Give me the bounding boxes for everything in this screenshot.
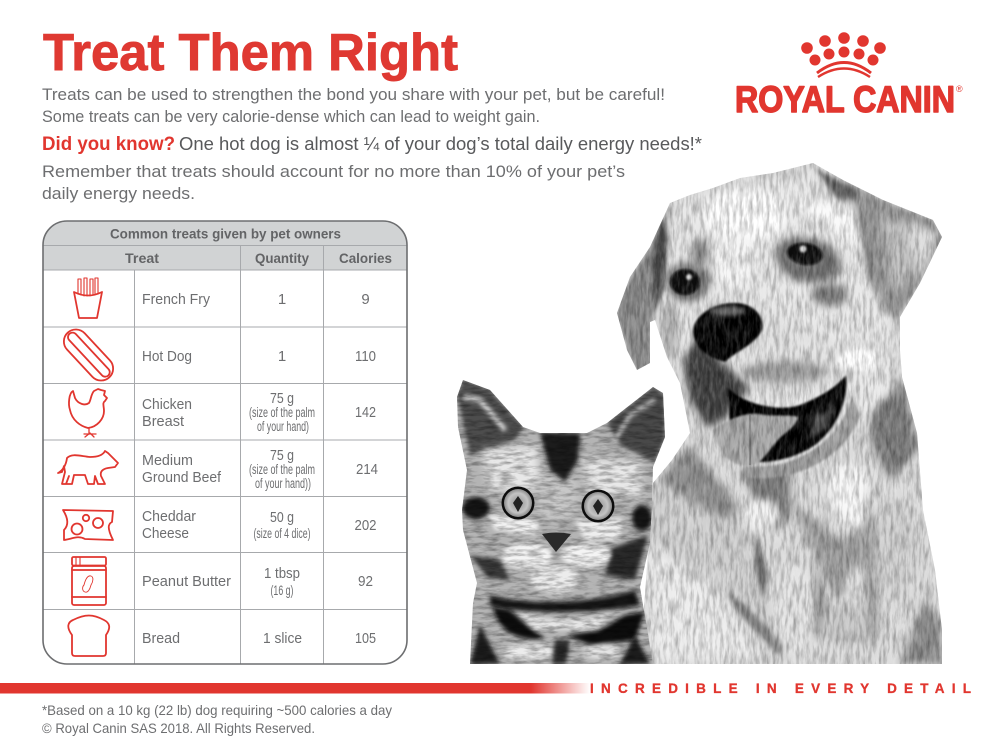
illustration: cat [450, 375, 670, 670]
dog nose [693, 303, 763, 362]
row: cheddar cheese: 202 [354, 517, 376, 534]
column headers: Treat [125, 250, 159, 266]
row: french fry: French Fry [142, 291, 210, 308]
reminder text [42, 163, 625, 203]
logo wordmark: ROYAL CANIN [735, 79, 955, 120]
row: cheddar cheese [142, 508, 376, 542]
row: chicken breast: 75 g [270, 390, 294, 407]
row: bread: 1 slice [263, 630, 302, 647]
row: bread: Bread [142, 630, 180, 647]
intro text [42, 86, 665, 126]
row: medium ground beef [142, 447, 378, 491]
icon: peanut butter jar [72, 557, 106, 605]
row: peanut butter: 92 [358, 573, 373, 590]
icon: hot dog [59, 325, 118, 385]
footnote: © Royal Canin SAS 2018. All Rights Reserved. [42, 720, 315, 736]
row: peanut butter: (16 g) [270, 583, 294, 598]
dog fur texture [610, 160, 950, 670]
cat face markings [462, 433, 652, 580]
row: bread: 105 [355, 630, 376, 647]
row: medium ground beef: Medium [142, 452, 193, 469]
cat nose [542, 532, 571, 552]
column headers: Quantity [255, 250, 309, 266]
row: bread [142, 630, 376, 647]
row: french fry: 9 [361, 291, 370, 308]
row: medium ground beef: Ground Beef [142, 469, 222, 486]
table heading: Common treats given by pet owners [110, 226, 341, 242]
dog mouth [728, 375, 847, 462]
row: cheddar cheese: Cheese [142, 525, 189, 542]
dog ears [615, 168, 945, 372]
row: chicken breast: of your hand) [257, 419, 309, 434]
icon: cheese [63, 510, 113, 540]
row: french fry [142, 291, 370, 308]
icon: crown [801, 32, 886, 77]
table: common treats [43, 221, 407, 664]
row: chicken breast: Chicken [142, 396, 192, 413]
table grid [43, 246, 407, 664]
illustration: dog [610, 160, 950, 670]
dog face [660, 170, 895, 478]
dog fur highlights [610, 160, 950, 670]
row: french fry: 1 [278, 291, 286, 308]
row: medium ground beef: 214 [356, 461, 378, 478]
dog tongue [713, 414, 798, 466]
icon: cow [58, 451, 118, 484]
row: medium ground beef: of your hand)) [255, 476, 311, 491]
row: hot dog: 1 [278, 348, 286, 365]
reminder text: daily energy needs. [42, 185, 195, 203]
cat ears [457, 380, 665, 462]
row: peanut butter: 1 tbsp [264, 565, 300, 582]
column headers [125, 250, 392, 266]
row: cheddar cheese: Cheddar [142, 508, 196, 525]
row: medium ground beef: (size of the palm [249, 462, 315, 477]
intro text: Some treats can be very calorie-dense which can lead to weight gain. [42, 108, 540, 126]
intro text: Treats can be used to strengthen the bond you share with your pet, but be careful! [42, 86, 665, 104]
dog right eye [786, 241, 824, 267]
reminder text: Remember that treats should account for no more than 10% of your pet’s [42, 163, 625, 181]
icon: chicken [69, 389, 107, 437]
did you know callout: Did you know? [42, 134, 175, 155]
footnote [42, 702, 392, 736]
row: cheddar cheese: (size of 4 dice) [254, 526, 310, 541]
row: chicken breast: 142 [355, 404, 376, 421]
cat fur texture [450, 375, 670, 670]
row: peanut butter: Peanut Butter [142, 573, 231, 590]
table border [43, 221, 407, 664]
row: hot dog: Hot Dog [142, 348, 192, 365]
registered mark: ® [956, 84, 963, 94]
row: medium ground beef: 75 g [270, 447, 294, 464]
cat chest stripes [470, 590, 650, 664]
logo: Royal Canin [735, 32, 963, 120]
dog lower lip [745, 395, 860, 478]
title: Treat Them Right [43, 24, 458, 82]
footer bar [0, 683, 590, 694]
icon: bread [68, 616, 109, 656]
row: cheddar cheese: 50 g [270, 509, 294, 526]
row: hot dog [142, 348, 376, 365]
did you know callout: One hot dog is almost ¼ of your dog’s total daily energy needs!* [179, 134, 702, 154]
cat eyes [502, 486, 614, 522]
dog left eye [670, 269, 700, 295]
footnote: *Based on a 10 kg (22 lb) dog requiring ~500 calories a day [42, 702, 392, 718]
row: hot dog: 110 [355, 348, 376, 365]
icon: french fries [74, 278, 102, 318]
row: chicken breast: Breast [142, 413, 185, 430]
row: chicken breast: (size of the palm [249, 405, 315, 420]
row: chicken breast [142, 390, 376, 434]
dog body shading [640, 370, 942, 664]
cat muzzle [502, 543, 611, 593]
table header band [43, 221, 407, 270]
tagline: INCREDIBLE IN EVERY DETAIL [590, 681, 971, 696]
column headers: Calories [339, 250, 392, 266]
row: peanut butter [142, 565, 373, 598]
